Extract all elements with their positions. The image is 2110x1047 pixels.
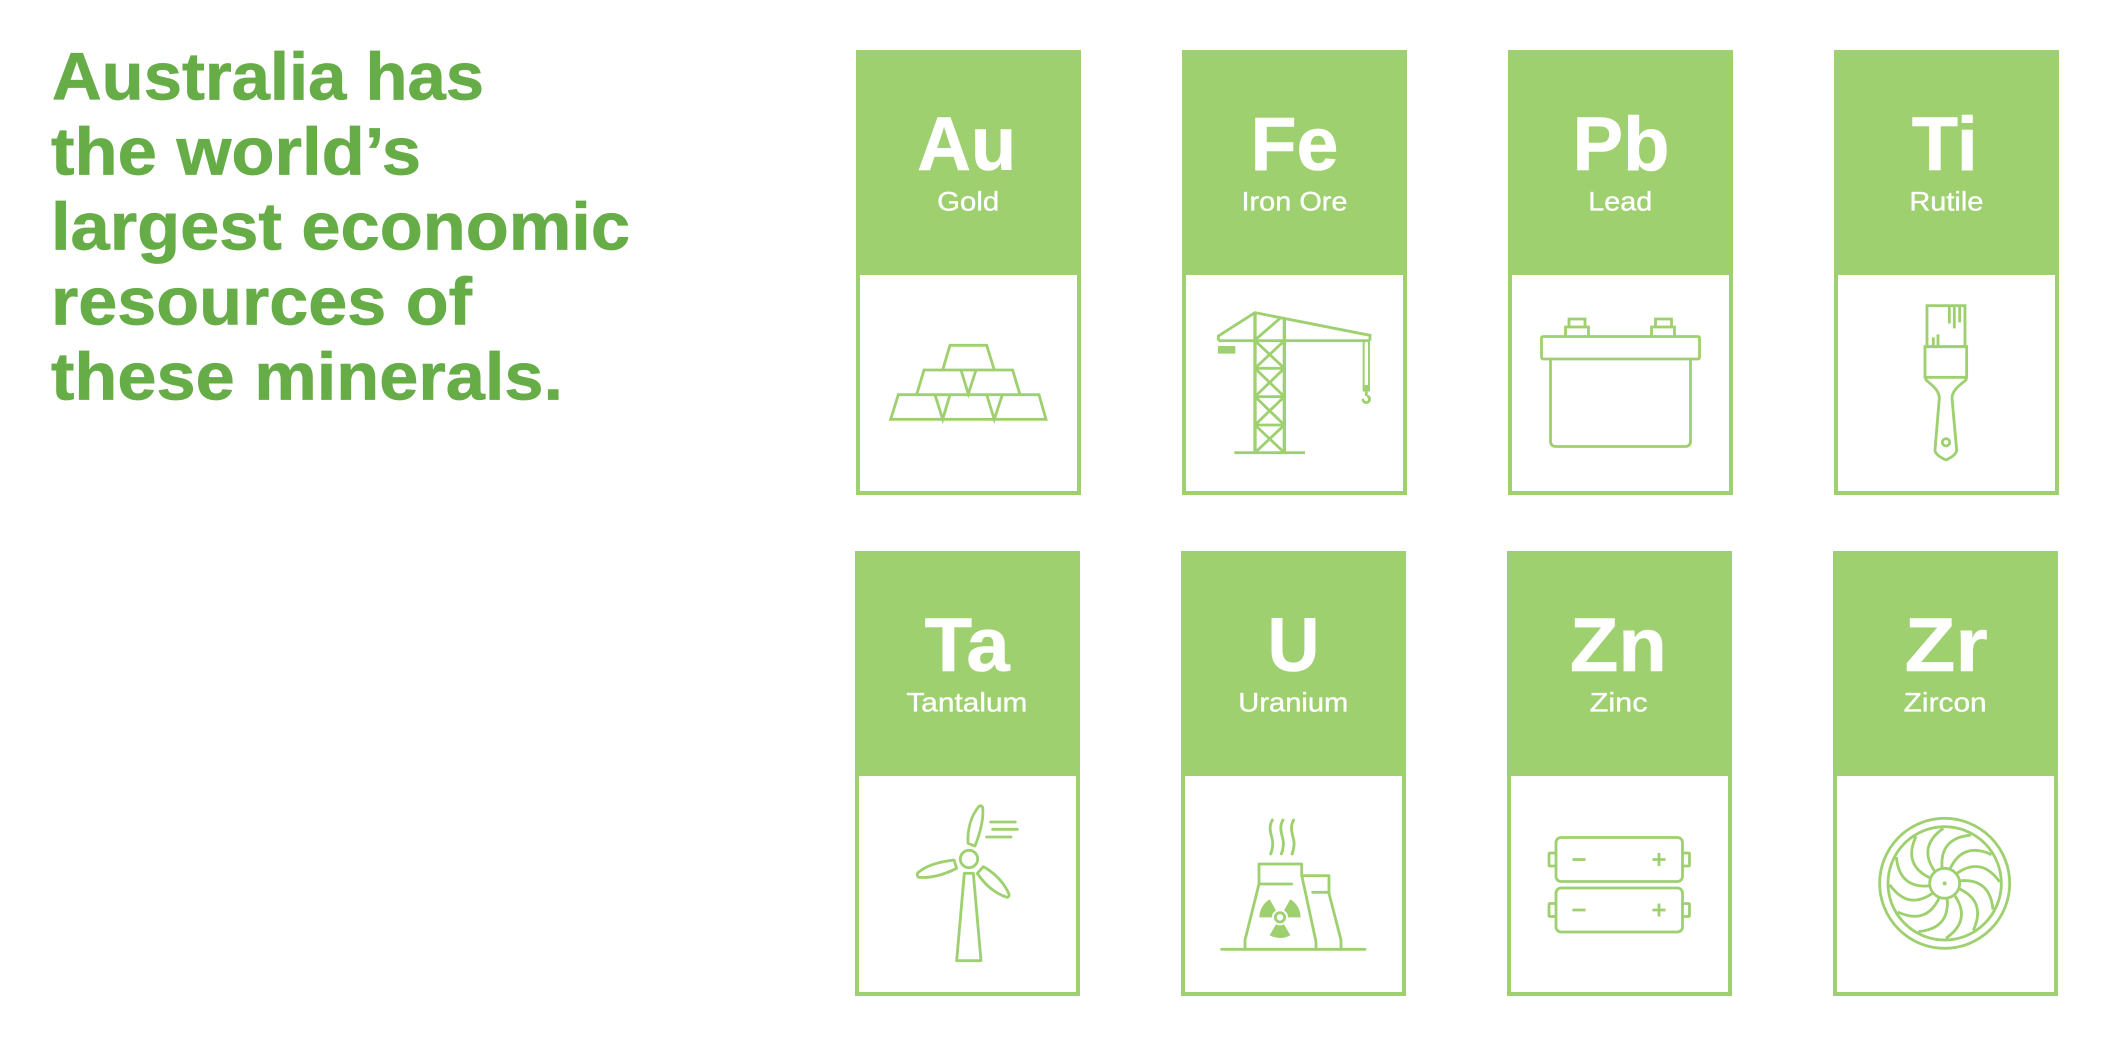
panel: tantalum [855,551,1080,994]
icon: paint brush [1925,306,1967,460]
panel: gold: Au [917,102,1016,187]
panel: zinc: Zinc [1590,688,1648,718]
panel: rutile: Rutile [1909,186,1983,216]
panel: lead: Lead [1588,186,1652,216]
icon: wind turbine [917,806,1017,961]
icon: crane [1218,313,1370,453]
title: largest economic [51,190,630,264]
panel: zircon: Zircon [1904,688,1987,718]
panel: tantalum: Ta [925,603,1010,688]
panel: iron ore: Iron Ore [1242,186,1348,216]
title: these minerals. [51,340,563,414]
icon: turbine fan [1880,818,2010,948]
icon: gold bars [891,345,1046,419]
title: the world’s [51,114,421,190]
panel: uranium: Uranium [1238,688,1348,718]
title [51,40,630,414]
icon: car battery [1542,319,1700,446]
icon: nuclear plant [1222,820,1365,949]
panel: iron ore [1182,50,1407,493]
icon: two batteries [1549,838,1690,932]
panel: iron ore: Fe [1250,102,1338,187]
panel: lead [1508,50,1733,493]
panel: uranium [1181,551,1406,994]
title: resources of [51,264,473,340]
panel: zinc [1507,551,1732,994]
panel: uranium: U [1268,603,1320,688]
panel: zinc: Zn [1570,603,1667,688]
panel: rutile: Ti [1912,102,1978,187]
panel: zircon: Zr [1905,603,1988,688]
panel: tantalum: Tantalum [906,688,1027,718]
panel: rutile [1834,50,2059,493]
panel: gold: Gold [937,186,999,216]
panel: lead: Pb [1572,102,1670,187]
panel: zircon [1833,551,2058,994]
panel: gold [856,50,1081,493]
title: Australia has [52,40,484,114]
